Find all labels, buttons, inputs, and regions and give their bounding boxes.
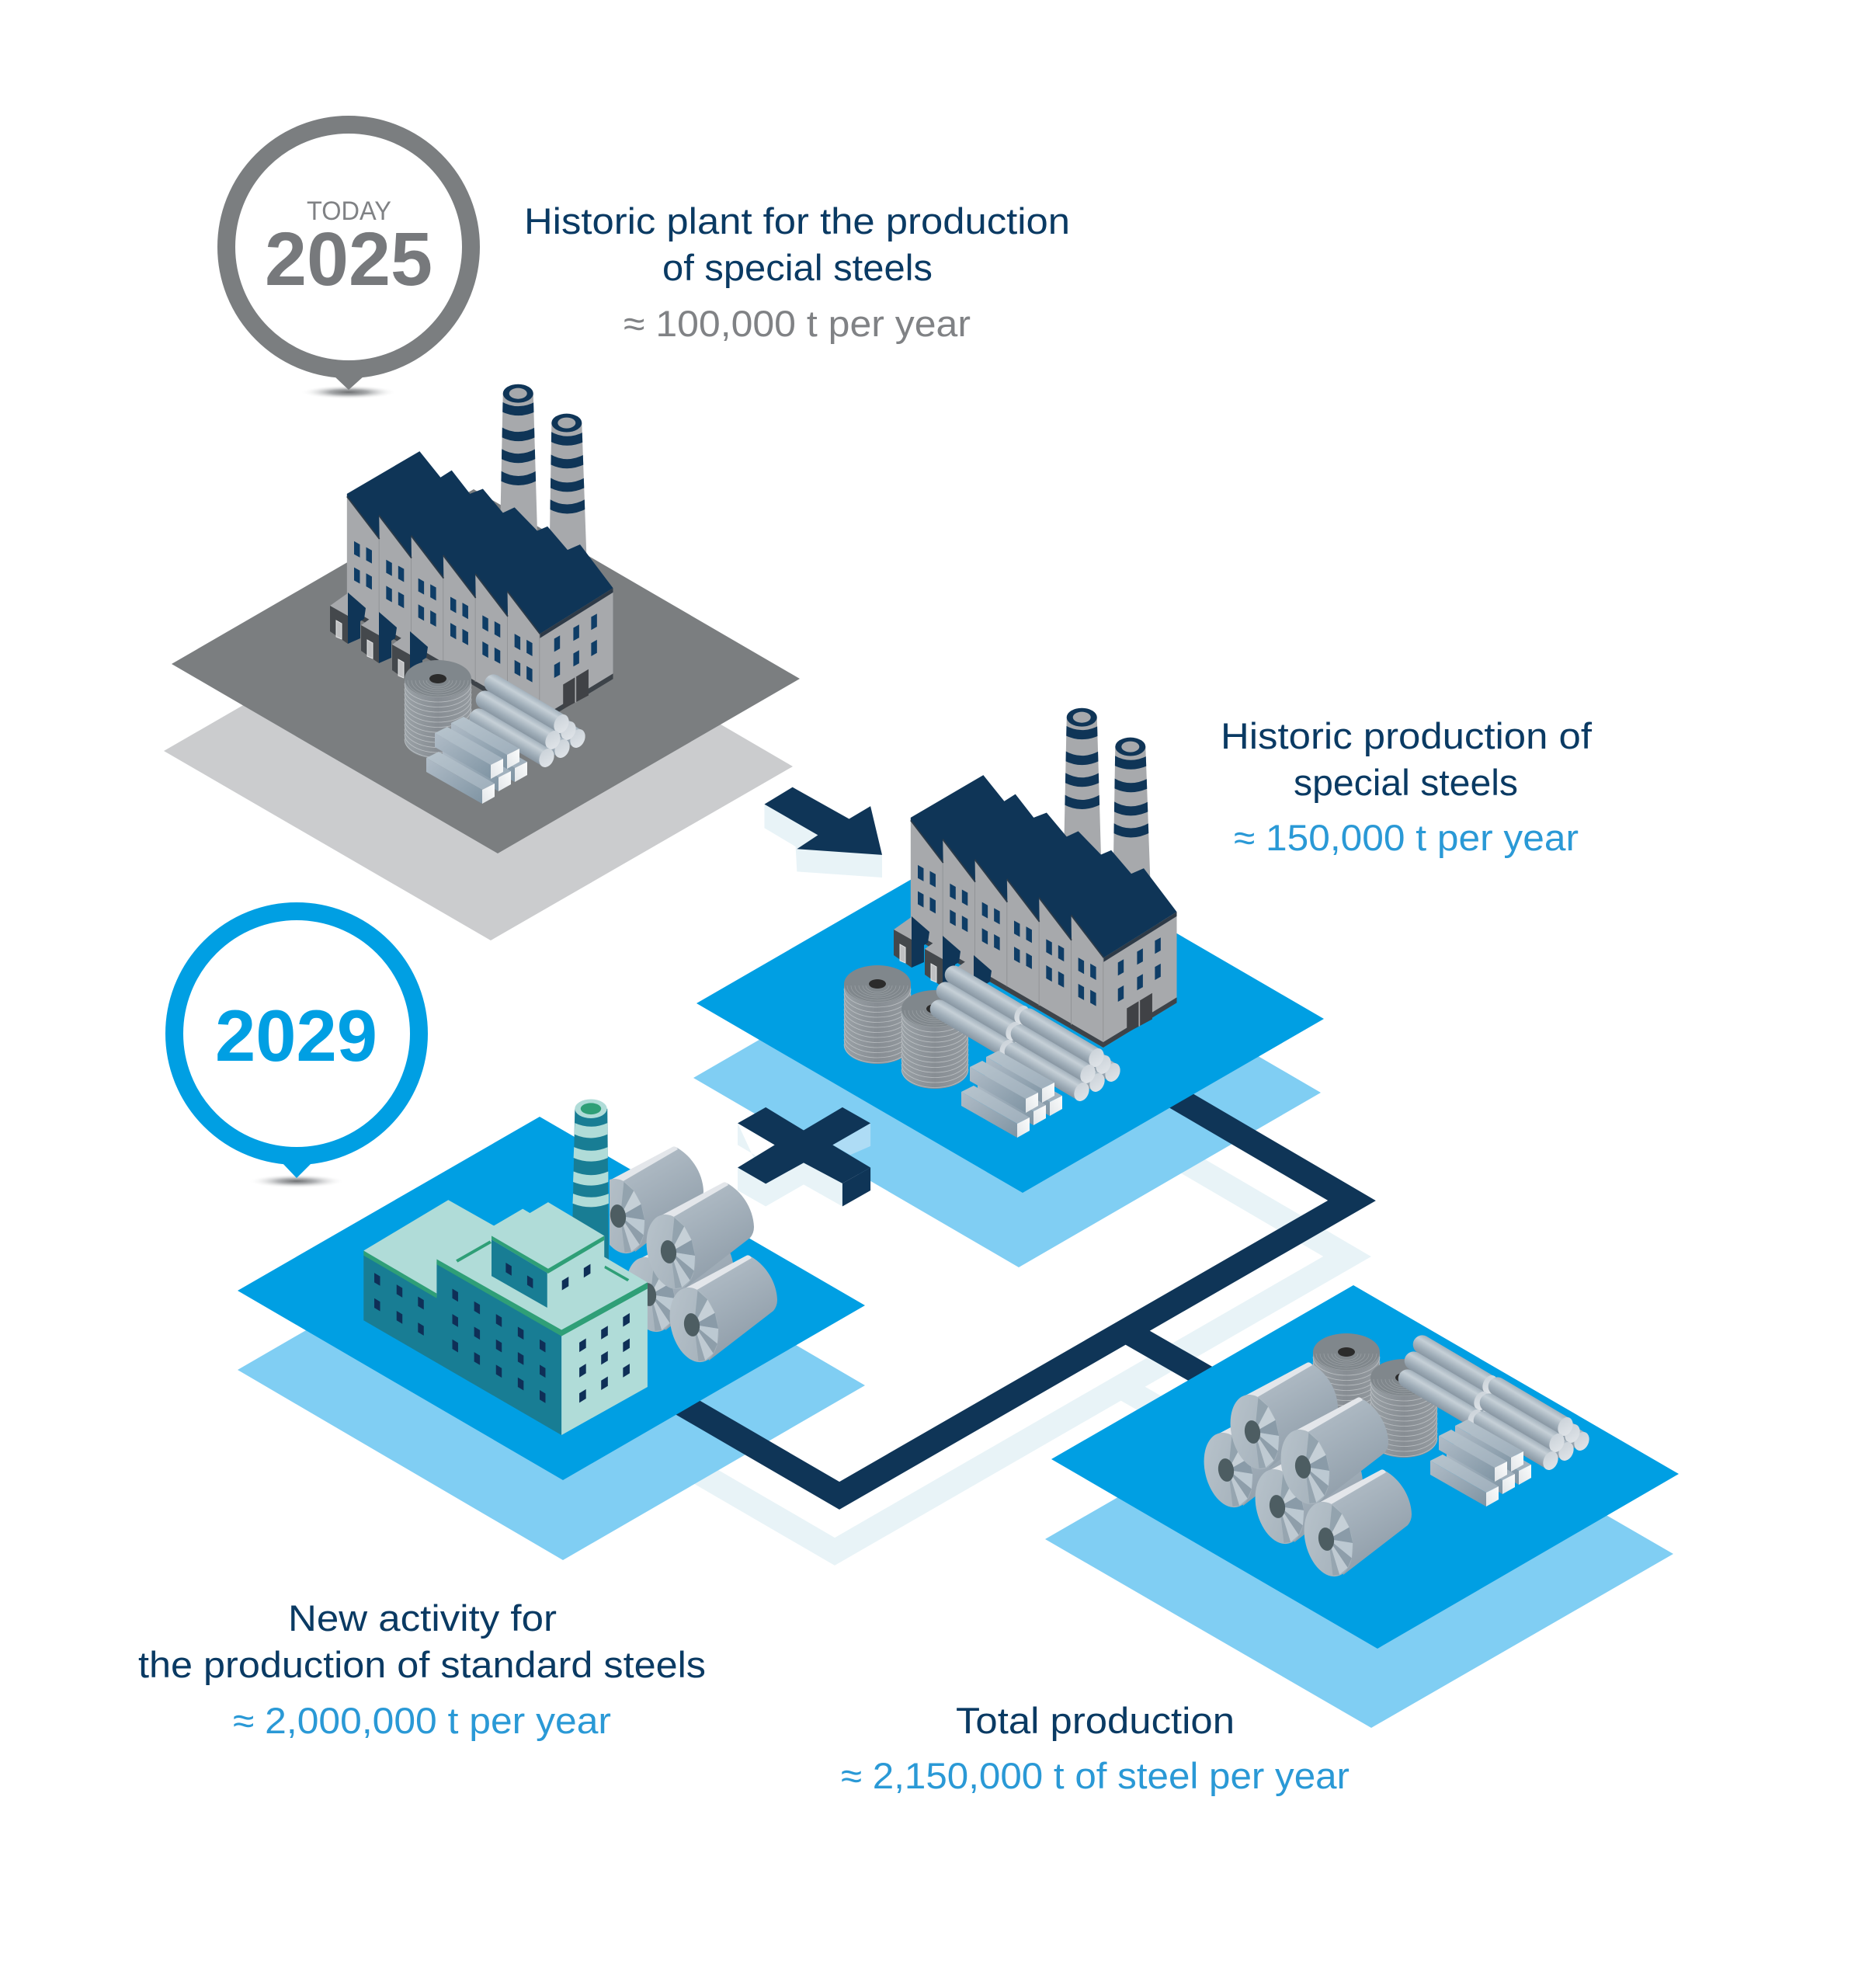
factory: historic production 2029: [894, 708, 1176, 1048]
text: historic plant: ≈ 100,000 t per year: [624, 303, 971, 344]
building: new teal plant: [363, 1200, 648, 1435]
pin: 2029: 2029: [215, 995, 377, 1076]
text: total production: [841, 1700, 1350, 1796]
plate: light blue layer new activity: [238, 1195, 865, 1560]
pipe: connector: [652, 1091, 1352, 1496]
text: total production: Total production: [956, 1700, 1235, 1741]
plus sign: [738, 1107, 870, 1206]
rolls: new plant steel coils: [610, 1146, 777, 1362]
arrow: 2025 to later: [764, 787, 882, 878]
materials: coils and bars plant 2: [844, 965, 1123, 1138]
pin: today 2025: [227, 124, 471, 399]
text: historic production: Historic production of: [1221, 715, 1593, 756]
pin: today 2025: TODAY: [307, 196, 391, 226]
text: new activity: [138, 1597, 706, 1741]
plate: gray top layer: [172, 489, 800, 853]
plate: gray shadow layer: [164, 576, 793, 940]
pipe shadow: [648, 1147, 1347, 1552]
text: historic plant: Historic plant for the production: [524, 200, 1070, 242]
text: historic production: [1221, 715, 1593, 858]
text: historic production: special steels: [1294, 762, 1518, 803]
factory: historic plant 2025: [330, 384, 613, 724]
plate: light blue layer plant 2: [693, 903, 1321, 1267]
text: historic plant: of special steels: [662, 247, 933, 288]
plate: blue new activity: [238, 1117, 865, 1480]
pin: 2029: [174, 912, 419, 1188]
plate: light blue layer total: [1045, 1365, 1673, 1728]
text: historic production: ≈ 150,000 t per year: [1234, 817, 1579, 858]
chimney: new plant: [571, 1099, 609, 1262]
plate: blue plant 2: [696, 829, 1324, 1193]
pin: today 2025: 2025: [265, 217, 432, 301]
text: new activity: ≈ 2,000,000 t per year: [233, 1700, 611, 1741]
materials: coil stack and bars 2025: [405, 660, 588, 804]
plate: blue total: [1051, 1285, 1679, 1649]
text: new activity: New activity for: [288, 1597, 557, 1639]
text: total production: ≈ 2,150,000 t of steel per year: [841, 1755, 1350, 1796]
text: historic plant: [524, 200, 1070, 344]
text: new activity: the production of standard steels: [138, 1644, 706, 1685]
materials: total production stock: [1197, 1333, 1592, 1582]
